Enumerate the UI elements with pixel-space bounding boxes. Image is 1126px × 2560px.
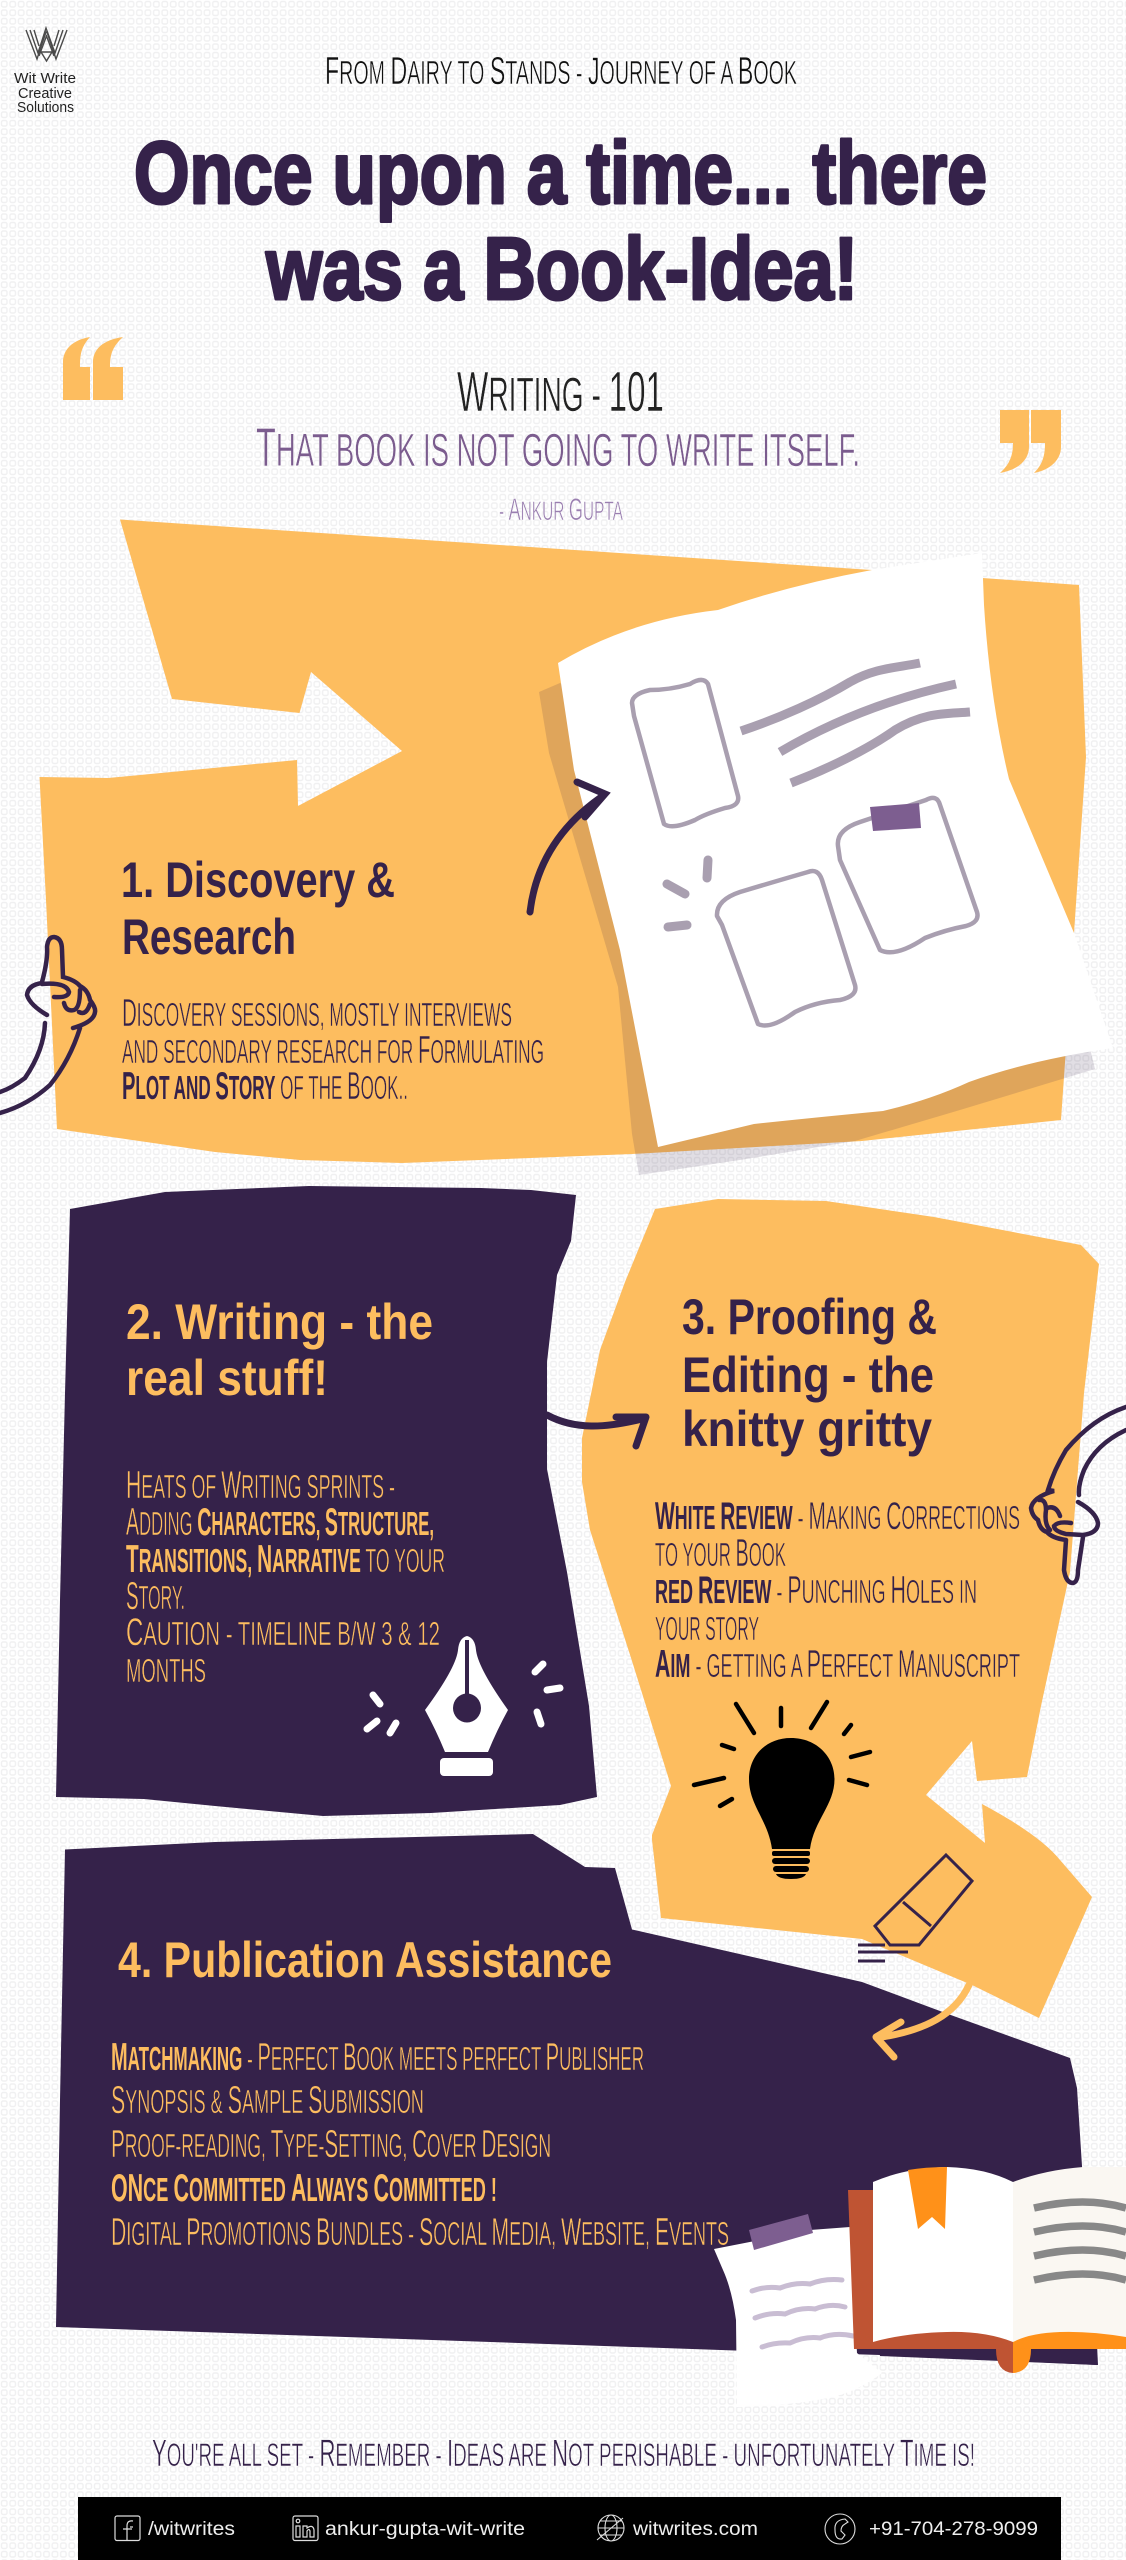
footer bar [78,2497,1061,2560]
closing line: YOU'RE ALL SET - REMEMBER - IDEAS ARE NOT PERISHABLE - UNFORTUNATELY TIME IS! [152,2432,975,2474]
body text: discovery: PLOT AND STORY OF THE BOOK.. [122,1065,408,1108]
heading: writing: 2. Writing - the [126,1294,433,1350]
panel: 1 discovery and research [40,520,1113,1175]
body text: proofing: WHITE REVIEW - MAKING CORRECTIONS [655,1495,1020,1538]
icon: fountain pen nib [367,1636,560,1776]
logo text: Solutions [17,100,74,116]
arrow: proofing to publication [876,1985,969,2057]
book shadow [878,2345,1098,2365]
cover right [1013,2325,1126,2373]
icon: facebook [115,2516,140,2540]
subtitle: FROM DAIRY TO STANDS - JOURNEY OF A BOOK [325,50,797,93]
body text: writing [126,1464,445,1689]
illustration: note paper [714,2214,882,2407]
body text: proofing: TO YOUR BOOK [655,1532,786,1575]
logo: Wit Write Creative Solutions [14,28,76,116]
heading: proofing: Editing - the [682,1347,934,1403]
icon: light bulb [694,1702,870,1879]
right page [1013,2167,1126,2342]
sketch text lines [741,663,970,783]
heading: discovery: Research [122,909,296,965]
icon: hand pointing up [0,937,95,1113]
logo text: Creative [18,86,72,102]
footer: website: witwrites.com [632,2519,758,2540]
icon: globe [597,2515,624,2541]
body text: proofing: AIM - GETTING A PERFECT MANUSCRIPT [655,1643,1020,1686]
note sheet [714,2227,882,2407]
icon: W monogram [26,28,67,61]
body text: discovery [122,992,544,1108]
body text: proofing: RED REVIEW - PUNCHING HOLES IN [655,1569,977,1612]
icon: linkedin [293,2516,318,2540]
quote heading: WRITING - 101 [457,361,664,424]
sketch boxes [632,680,978,1026]
sticky tape [870,803,921,831]
panel shape [56,1834,1097,2365]
heading: writing: real stuff! [126,1350,328,1406]
cover [848,2190,1013,2373]
heading: discovery [121,852,395,965]
tape [749,2214,813,2250]
title line 2: was a Book-Idea! [265,219,858,318]
footer: phone number: +91-704-278-9099 [869,2519,1038,2540]
left page [873,2167,1013,2342]
logo text: Wit Write [14,71,76,87]
bookmark [908,2167,947,2229]
paper shadow [539,683,1095,1175]
quote block [256,361,860,527]
body text: writing: HEATS OF WRITING SPRINTS - [126,1464,395,1507]
icon: opening quote [63,337,123,400]
footer: linkedin handle: ankur-gupta-wit-write [325,2519,525,2540]
body text: writing: STORY. [126,1575,185,1618]
body text: publication [111,2036,729,2254]
illustration: open book [848,2167,1126,2373]
body text: publication: DIGITAL PROMOTIONS BUNDLES - SOCIAL MEDIA, WEBSITE, EVENTS [111,2211,729,2254]
arrow: writing to proofing [547,1415,646,1446]
body text: writing: TRANSITIONS, NARRATIVE TO YOUR [126,1538,445,1581]
panel shape with arrow notch [40,520,1086,1163]
heading: discovery: 1. Discovery & [121,852,395,908]
heading: writing [126,1294,433,1406]
footer: facebook handle: /witwrites [148,2519,235,2540]
body text: discovery: AND SECONDARY RESEARCH FOR FORMULATING [122,1029,544,1072]
heading: proofing: 3. Proofing & [682,1289,937,1345]
panel: 4 publication assistance [56,1834,1097,2365]
body text: publication: MATCHMAKING - PERFECT BOOK MEETS PERFECT PUBLISHER [111,2036,644,2079]
icon: closing quote [1000,410,1061,473]
panel shape [56,1186,597,1816]
body text: proofing: YOUR STORY [655,1610,759,1647]
note lines [752,2280,853,2347]
body text: writing: MONTHS [126,1652,206,1689]
panel shape [582,1199,1099,2018]
heading: proofing: knitty gritty [682,1401,932,1457]
panel: 2 writing [56,1186,597,1816]
illustration: paper sheet [558,553,1113,1147]
panel: 3 proofing and editing [582,1199,1099,2018]
body text: publication: PROOF-READING, TYPE-SETTING, COVER DESIGN [111,2123,551,2166]
heading: publication: 4. Publication Assistance [118,1932,612,1988]
body text: publication: ONCE COMMITTED ALWAYS COMMITTED ! [111,2167,497,2210]
title [134,123,987,318]
heading: proofing [682,1289,937,1457]
logo text [14,71,76,116]
body text: writing: ADDING CHARACTERS, STRUCTURE, [126,1501,434,1544]
body text: publication: SYNOPSIS & SAMPLE SUBMISSION [111,2079,424,2122]
arrow: to paper [530,782,605,912]
page lines [1034,2202,1126,2280]
icon: hand pointing down [1031,1407,1126,1583]
sheet [558,553,1113,1147]
icon: eraser [858,1855,972,1961]
body text: writing: CAUTION - TIMELINE B/W 3 & 12 [126,1611,440,1654]
quote author: - ANKUR GUPTA [499,491,623,527]
sketch ticks [667,860,708,927]
body text: discovery: DISCOVERY SESSIONS, MOSTLY INTERVIEWS [122,992,512,1035]
body text: proofing [655,1495,1020,1686]
icon: phone [825,2514,855,2544]
